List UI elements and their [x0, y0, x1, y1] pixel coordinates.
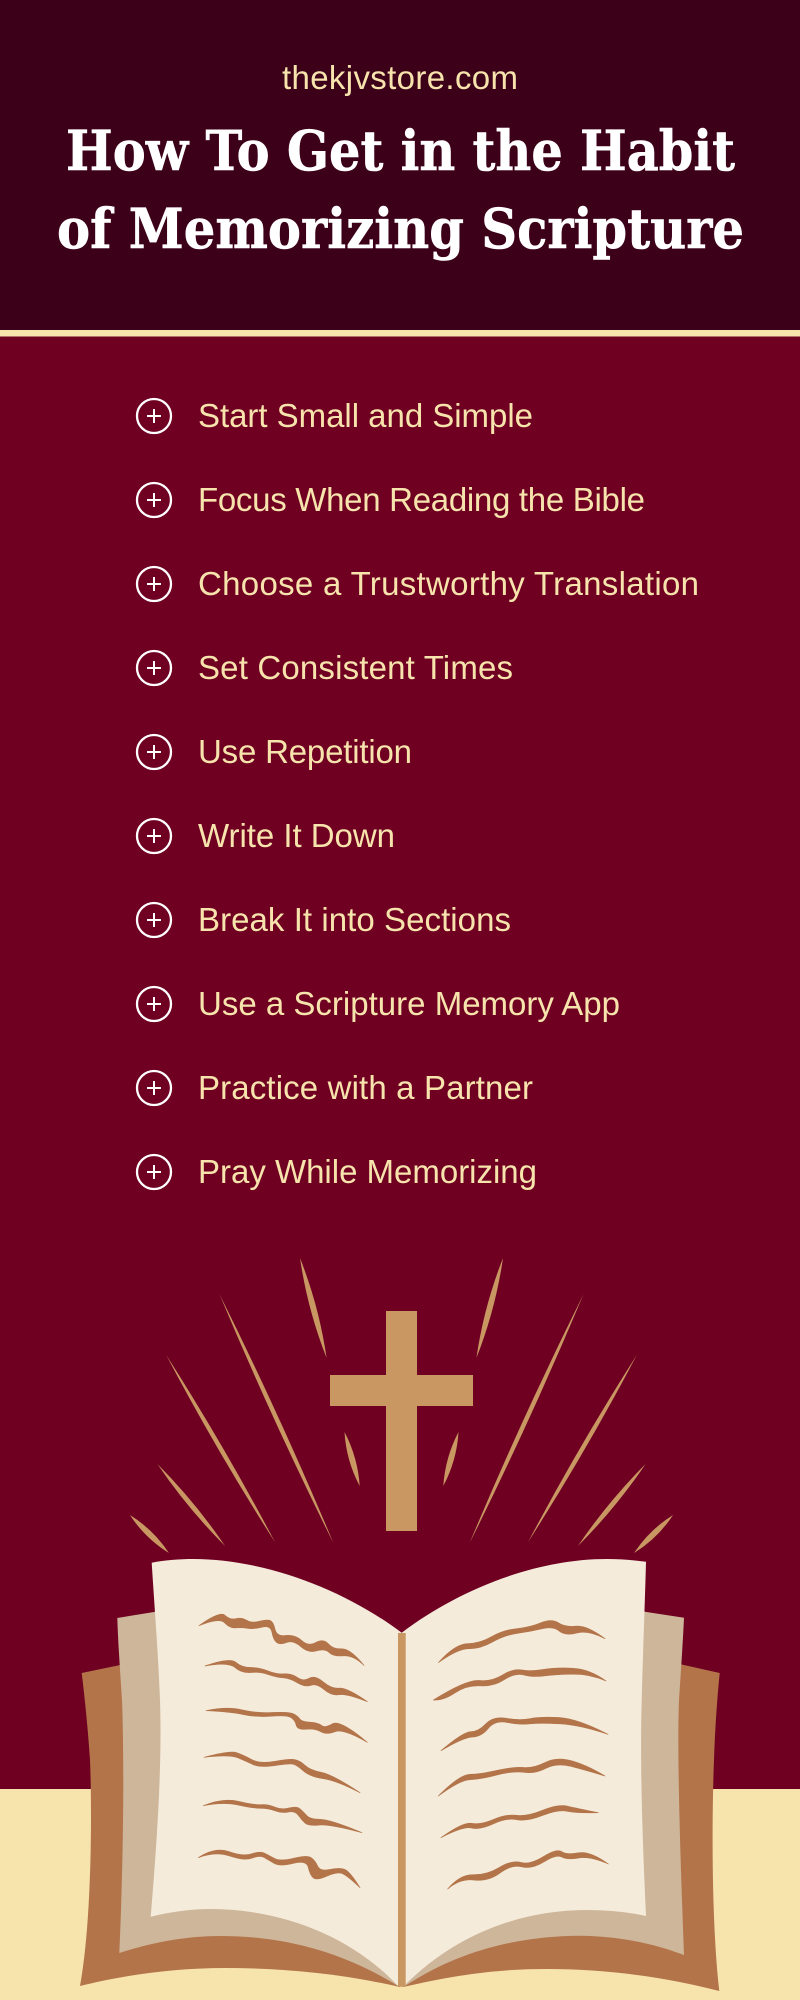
left page writing — [198, 1614, 367, 1888]
list item 10: Pray While Memorizing — [198, 1153, 537, 1190]
list item 5: Use Repetition — [198, 733, 412, 770]
icon: light rays — [130, 1258, 673, 1553]
list item 4: Set Consistent Times — [198, 649, 513, 686]
icon: open bible — [80, 1559, 720, 1991]
list item 9: Practice with a Partner — [198, 1069, 533, 1106]
back cover right — [403, 1663, 720, 1991]
title: How To Get in the Habit — [66, 118, 736, 183]
list item 8: Use a Scripture Memory App — [198, 985, 620, 1022]
panel: tips list — [137, 397, 699, 1190]
list item 3: Choose a Trustworthy Translation — [198, 565, 699, 602]
right page writing — [433, 1621, 608, 1889]
icon: cross — [330, 1311, 473, 1531]
back cover left — [80, 1663, 400, 1987]
site name: thekjvstore.com — [282, 59, 518, 96]
list item 7: Break It into Sections — [198, 901, 511, 938]
title: of Memorizing Scripture — [57, 196, 744, 261]
spine — [398, 1633, 406, 1987]
page stack right — [405, 1611, 684, 1986]
list item 6: Write It Down — [198, 817, 395, 854]
list item 1: Start Small and Simple — [198, 397, 533, 434]
panel: cream table strip — [0, 1789, 800, 2000]
page stack left — [117, 1611, 398, 1986]
list item 2: Focus When Reading the Bible — [198, 481, 645, 518]
right page — [402, 1559, 646, 1987]
panel: header — [0, 0, 800, 336]
left page — [151, 1559, 402, 1987]
title — [57, 118, 744, 261]
